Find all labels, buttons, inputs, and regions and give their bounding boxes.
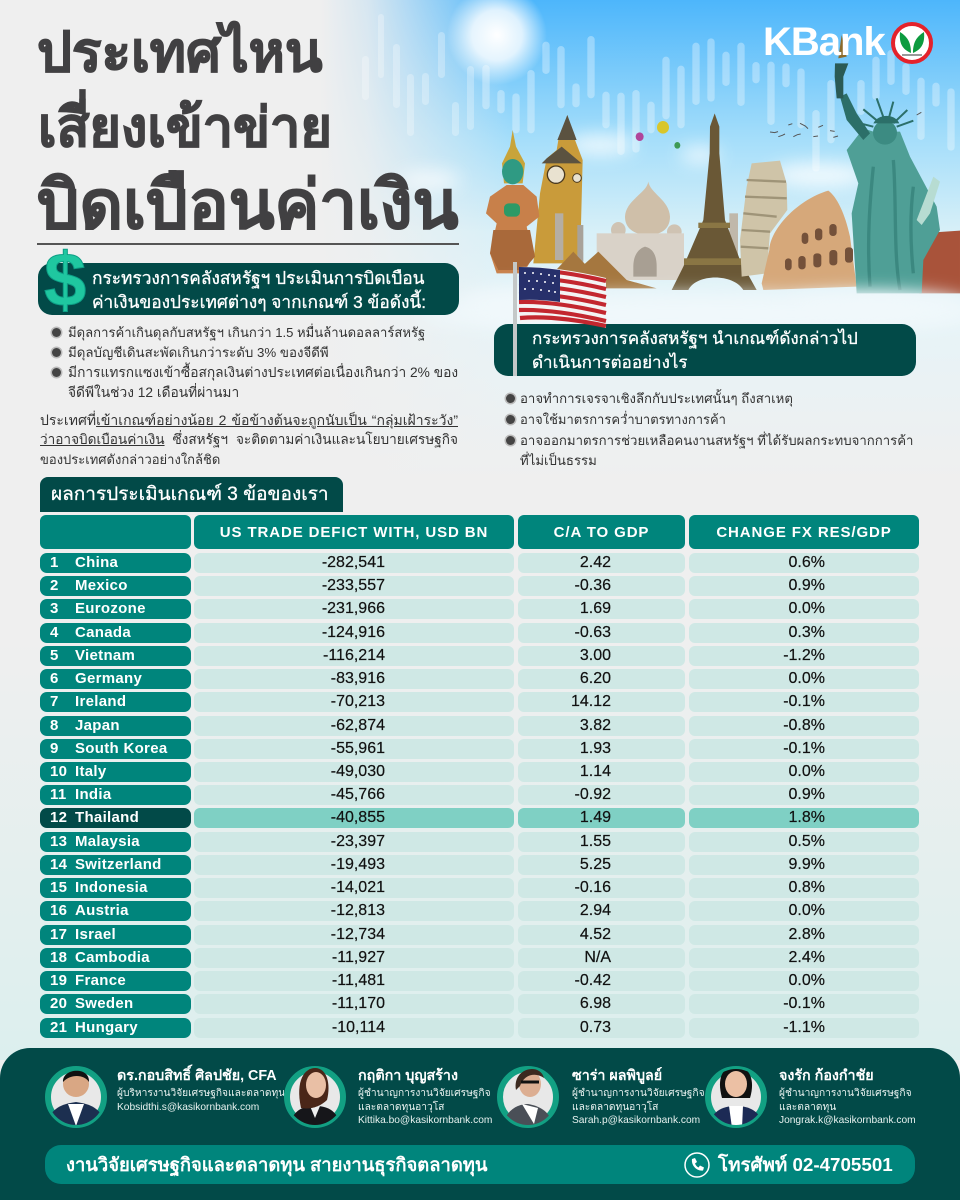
person: Jongrak: จงรัก ก้องกำชัย [779,1068,874,1084]
row: Japan: -62,874 [331,717,385,734]
birds [770,112,921,137]
row: South Korea: -55,961 [331,740,385,757]
row: Thailand highlighted: 12 [50,809,67,826]
person: Jongrak: ผู้ชำนาญการงานวิจัยเศรษฐกิจ [779,1088,912,1099]
row: Germany: 0.0% [789,670,825,687]
row: Israel: -12,734 [331,926,385,943]
title rule [37,243,459,245]
row: Mexico: 0.9% [789,577,825,594]
row: Sweden: 20 [50,995,67,1012]
person: Sarah: ซาร่า ผลพิบูลย์ [572,1068,662,1084]
row: China: 0.6% [789,554,825,571]
row: Mexico: -233,557 [322,577,385,594]
panel heading text [92,268,426,312]
header: trade deficit: US TRADE DEFICT WITH, USD BN [220,524,488,541]
row: Vietnam [40,646,919,666]
row: China: China [75,554,118,571]
row: Japan: 8 [50,717,59,734]
row: Eurozone [40,599,919,619]
row: Canada [40,623,919,643]
row: Sweden [40,994,919,1014]
row: Japan [40,716,919,736]
person: Kobsidthi: ผู้บริหารงานวิจัยเศรษฐกิจและตลาดทุน [117,1088,285,1099]
row: Austria: Austria [75,902,129,919]
row: South Korea: -0.1% [783,740,825,757]
landmark: taj mahal [555,182,738,280]
row: Cambodia: Cambodia [75,949,150,966]
icon: US flag on pole [513,262,606,376]
row: India: India [75,786,112,803]
panel heading text: ดำเนินการต่ออย่างไร [532,353,688,372]
title [37,20,459,245]
row: Indonesia: Indonesia [75,879,148,896]
person: Kobsidthi: Kobsidthi.s@kasikornbank.com [117,1102,259,1112]
row: Canada: -124,916 [322,624,385,641]
bullet 3 [504,432,913,468]
panel: how the US Treasury assesses [38,238,459,323]
row: Austria: 16 [50,902,67,919]
row: Austria: 2.94 [580,902,611,919]
paragraph: monitoring list: ว่าอาจบิดเบือนค่าเงิน ซึ่งสหรัฐฯ จะติดตามค่าเงินและนโยบายเศรษฐกิจ [40,432,458,447]
person: Kittika: Kittika.bo@kasikornbank.com [358,1115,492,1126]
clouds under landmarks [420,288,960,334]
row: Japan: -0.8% [783,717,825,734]
row: Eurozone: 0.0% [789,600,825,617]
icon: phone [683,1151,711,1179]
row: Italy: Italy [75,763,107,780]
bullet 2: อาจใช้มาตรการคว่ำบาตรทางการค้า [520,412,726,427]
row: Indonesia: 15 [50,879,67,896]
row: Eurozone: -231,966 [322,600,385,617]
panel heading text [532,328,858,372]
row: Malaysia: 13 [50,833,67,850]
person: Jongrak: และตลาดทุน [779,1102,836,1112]
row: Italy: 0.0% [789,763,825,780]
row: Israel [40,925,919,945]
row: Ireland: 7 [50,693,59,710]
person: Sarah: Sarah.p@kasikornbank.com [572,1115,700,1126]
row: Japan: Japan [75,717,120,734]
row: France: -11,481 [332,972,385,989]
row: Israel: 4.52 [580,926,611,943]
row: South Korea: 9 [50,740,59,757]
row: Austria: -12,813 [331,902,385,919]
row: Eurozone: 3 [50,600,59,617]
panel heading text: กระทรวงการคลังสหรัฐฯ นำเกณฑ์ดังกล่าวไป [532,329,858,348]
row: Germany: -83,916 [331,670,385,687]
person: Kittika [358,1068,492,1126]
KBank logo [763,20,933,64]
person: Jongrak: Jongrak.k@kasikornbank.com [779,1115,916,1126]
row: China: 2.42 [580,554,611,571]
row: India: -0.92 [575,786,611,803]
landmark: eiffel tower [672,113,757,290]
row: India [40,785,919,805]
row: Ireland: 14.12 [571,693,611,710]
row: Hungary: -1.1% [783,1019,825,1036]
row: Malaysia [40,832,919,852]
row: Sweden: -0.1% [783,995,825,1012]
row: Indonesia [40,878,919,898]
row: Eurozone: Eurozone [75,600,146,617]
person: Kobsidthi [117,1064,285,1112]
row: China: -282,541 [322,554,385,571]
row: Israel: 17 [50,926,67,943]
footer contact bar [45,1145,915,1184]
row: Sweden: -11,170 [332,995,385,1012]
row: Israel: Israel [75,926,116,943]
table tab heading [40,477,343,512]
row: Mexico: Mexico [75,577,128,594]
bullet 3: จีดีพีในช่วง 12 เดือนที่ผ่านมา [68,385,239,400]
header: fx reserves: CHANGE FX RES/GDP [716,524,892,541]
row: Italy: 1.14 [580,763,611,780]
person: Sarah: ผู้ชำนาญการงานวิจัยเศรษฐกิจ [572,1088,705,1099]
row: Vietnam: 3.00 [580,647,611,664]
row: Switzerland: 9.9% [789,856,825,873]
row: France: -0.42 [575,972,611,989]
icon: dollar sign: $ [44,238,86,323]
row: Austria: 0.0% [789,902,825,919]
row: Vietnam: Vietnam [75,647,135,664]
person: Kittika: และตลาดทุนอาวุโส [358,1102,444,1112]
row: Thailand highlighted [40,808,919,828]
row: Ireland: Ireland [75,693,126,710]
person: Kittika: กฤติกา บุญสร้าง [358,1068,458,1084]
landmark: statue of liberty [835,35,940,293]
paragraph: monitoring list [40,410,458,467]
row: Italy [40,762,919,782]
row: Thailand highlighted: Thailand [75,809,139,826]
row: Sweden: Sweden [75,995,133,1012]
panel header background [38,263,459,315]
row: Hungary [40,1018,919,1038]
landmark: leaning tower of pisa [740,161,787,277]
row: Germany: 6.20 [580,670,611,687]
row: Mexico: 2 [50,577,59,594]
portrait: Kittika [284,1066,346,1128]
bullet 1: อาจทำการเจรจาเชิงลึกกับประเทศนั้นๆ ถึงสาเหตุ [520,391,793,406]
landmark: red rock [919,231,960,293]
row: Switzerland [40,855,919,875]
row: Thailand highlighted: 1.8% [789,809,825,826]
department name: งานวิจัยเศรษฐกิจและตลาดทุน สายงานธุรกิจตลาดทุน [66,1154,487,1175]
row: India: -45,766 [331,786,385,803]
row: Thailand highlighted: 1.49 [580,809,611,826]
row: Cambodia: 2.4% [789,949,825,966]
title line 3: บิดเบือนค่าเงิน [37,168,458,243]
bullet 1: มีดุลการค้าเกินดุลกับสหรัฐฯ เกินกว่า 1.5 หมื่นล้านดอลลาร์สหรัฐ [68,325,425,340]
header: current account: C/A TO GDP [554,524,649,541]
row: Hungary: Hungary [75,1019,138,1036]
row: Hungary: 21 [50,1019,67,1036]
portrait: Sarah [497,1066,559,1128]
row: Cambodia: 18 [50,949,67,966]
row: Malaysia: Malaysia [75,833,140,850]
row: Switzerland: 5.25 [580,856,611,873]
paragraph: monitoring list: ประเทศที่เข้าเกณฑ์อย่างน้อย 2 ข้อข้างต้นจะถูกนับเป็น “กลุ่มเฝ้าระวัง” [40,412,458,428]
portrait: Jongrak [705,1066,767,1128]
row: Switzerland: 14 [50,856,67,873]
row: Japan: 3.82 [580,717,611,734]
row: Italy: -49,030 [331,763,385,780]
balloons [636,121,680,149]
row: Germany [40,669,919,689]
row: Vietnam: -116,214 [323,647,385,664]
landmark: pyramids [547,252,657,288]
row: India: 11 [50,786,66,803]
panel heading text: กระทรวงการคลังสหรัฐฯ ประเมินการบิดเบือน [92,268,424,288]
logo badge [891,22,933,64]
row: Germany: Germany [75,670,142,687]
row: Hungary: -10,114 [332,1019,385,1036]
landmark: colosseum [762,191,857,290]
portrait: Kobsidthi [45,1066,107,1128]
row: Indonesia: 0.8% [789,879,825,896]
bullet 2: มีดุลบัญชีเดินสะพัดเกินกว่าระดับ 3% ของจีดีพี [68,345,329,360]
row: Sweden: 6.98 [580,995,611,1012]
row: Eurozone: 1.69 [580,600,611,617]
person: Kobsidthi: ดร.กอบสิทธิ์ ศิลปชัย, CFA [117,1068,277,1084]
row: Vietnam: -1.2% [783,647,825,664]
row: Austria [40,901,919,921]
row: Italy: 10 [50,763,67,780]
bullet 3: มีการแทรกแซงเข้าซื้อสกุลเงินต่างประเทศต่อเนื่องเกินกว่า 2% ของ [68,365,458,380]
paragraph: monitoring list: ของประเทศดังกล่าวอย่างใกล้ชิด [40,452,220,467]
phone number: โทรศัพท์ 02-4705501 [718,1154,893,1175]
table tab heading: ผลการประเมินเกณฑ์ 3 ข้อของเรา [51,484,329,505]
bullet 3: อาจออกมาตรการช่วยเหลือคนงานสหรัฐฯ ที่ได้รับผลกระทบจากการค้า [520,433,913,448]
header: blank [40,515,191,549]
title line 2: เสี่ยงเข้าข่าย [38,98,332,158]
person: Sarah: และตลาดทุนอาวุโส [572,1102,658,1112]
row: Canada: 0.3% [789,624,825,641]
row: Cambodia: -11,927 [332,949,385,966]
person: Sarah [572,1066,747,1128]
row: Switzerland: Switzerland [75,856,162,873]
row: Mexico: -0.36 [575,577,611,594]
row: France [40,971,919,991]
row: Cambodia: N/A [584,949,611,966]
row: China [40,553,919,573]
table: assessment results [40,515,919,1038]
row: South Korea: South Korea [75,740,167,757]
panel heading text: ค่าเงินของประเทศต่างๆ จากเกณฑ์ 3 ข้อดังนี้: [92,292,426,312]
criteria list [50,324,458,400]
header: current account [518,515,685,549]
actions list [504,389,913,468]
bullet 3: ที่ไม่เป็นธรรม [520,453,597,468]
row: France: 19 [50,972,67,989]
row: Germany: 6 [50,670,59,687]
row: Mexico [40,576,919,596]
row: Malaysia: 0.5% [789,833,825,850]
row: Vietnam: 5 [50,647,59,664]
row: France: France [75,972,126,989]
row: South Korea [40,739,919,759]
row: Ireland [40,692,919,712]
row: Cambodia [40,948,919,968]
row: Canada: -0.63 [575,624,611,641]
header: fx reserves [689,515,919,549]
person: Kittika: ผู้ชำนาญการงานวิจัยเศรษฐกิจ [358,1088,491,1099]
row: Malaysia: 1.55 [580,833,611,850]
row: Switzerland: -19,493 [331,856,385,873]
row: Ireland: -0.1% [783,693,825,710]
row: France: 0.0% [789,972,825,989]
row: Indonesia: -0.16 [575,879,611,896]
wordmark: KBank [763,20,885,64]
row: China: 1 [50,554,59,571]
row: India: 0.9% [789,786,825,803]
panel: what the US Treasury does [494,324,916,376]
row: Thailand highlighted: -40,855 [331,809,385,826]
row: Canada: 4 [50,624,59,641]
row: Malaysia: -23,397 [331,833,385,850]
landmark: big ben [533,115,583,263]
bullet 3 [50,362,458,400]
title line 1: ประเทศไหน [37,21,322,83]
header: trade deficit [194,515,514,549]
row: Israel: 2.8% [789,926,825,943]
row: Ireland: -70,213 [331,693,385,710]
row: Canada: Canada [75,624,131,641]
row: Indonesia: -14,021 [331,879,385,896]
landmark: yaksha guardian [486,130,539,273]
person: Jongrak [779,1066,954,1128]
row: Hungary: 0.73 [580,1019,611,1036]
row: South Korea: 1.93 [580,740,611,757]
footer panel [0,1048,960,1200]
